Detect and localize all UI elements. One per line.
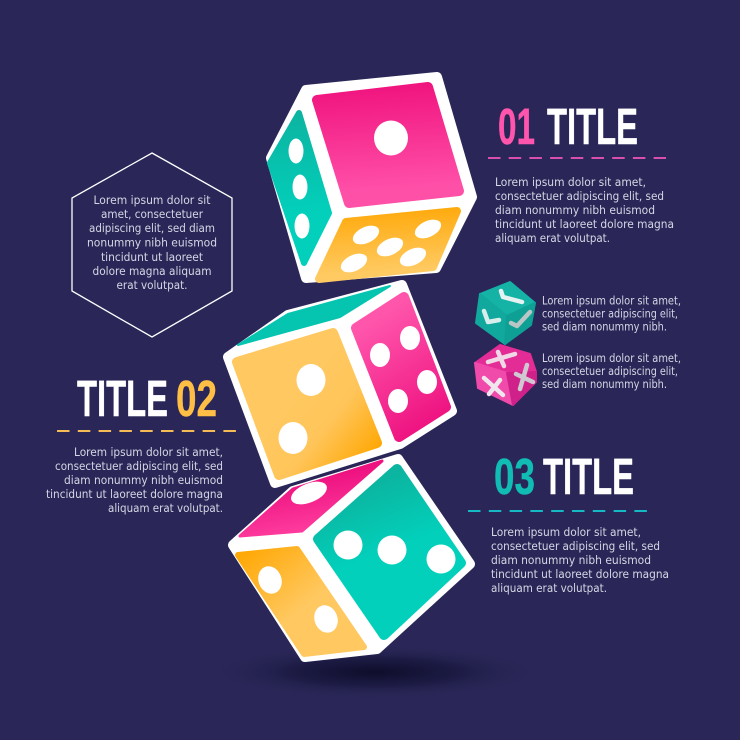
die 1 orange face: [319, 211, 457, 279]
die 1 pink face: [317, 87, 459, 203]
text 02: tincidunt ut laoreet dolore magna: [46, 488, 223, 501]
title 01: [498, 98, 638, 155]
hexagon text: [87, 194, 217, 292]
text 03: [491, 526, 669, 595]
small text: cross die: consectetuer adipiscing elit,: [542, 365, 678, 378]
title 01: 01: [498, 98, 535, 155]
die 3 pips: [254, 477, 456, 636]
title 03: [494, 448, 634, 505]
title 03: 03: [494, 448, 535, 505]
die 3: bottom die: [233, 459, 470, 657]
text 01: [495, 176, 674, 245]
hexagon text: amet, consectetuer: [101, 208, 203, 221]
text 01: diam nonummy nibh euismod: [495, 204, 655, 217]
die 3 teal face: [318, 469, 461, 635]
section 02: [46, 370, 236, 515]
section 03: [468, 448, 669, 595]
text 03: aliquam erat volutpat.: [491, 582, 607, 595]
die 2 pink face: [356, 297, 446, 437]
icon: teal check die: [476, 282, 535, 344]
text 03: tincidunt ut laoreet dolore magna: [491, 568, 669, 581]
die 1 pips: [288, 120, 444, 276]
text 02: [46, 446, 223, 515]
small text: cross die: [542, 352, 681, 391]
small text: check die: [542, 294, 681, 334]
small text: check die: consectetuer adipiscing elit,: [542, 308, 678, 320]
hexagon text: erat volutpat.: [116, 279, 188, 292]
die 3 orange face: [238, 549, 364, 654]
text 03: consectetuer adipiscing elit, sed: [491, 540, 660, 553]
hexagon text: Lorem ipsum dolor sit: [94, 194, 211, 207]
hexagon text: nonummy nibh euismod: [87, 236, 217, 250]
title 02: 02: [176, 370, 217, 427]
icon: pink cross die: [475, 345, 536, 405]
text 01: Lorem ipsum dolor sit amet,: [495, 176, 646, 189]
die 2 teal top face: [238, 286, 390, 345]
hexagon callout: [72, 153, 232, 337]
text 02: Lorem ipsum dolor sit amet,: [74, 446, 223, 459]
text 02: aliquam erat volutpat.: [108, 502, 223, 515]
small text: check die: Lorem ipsum dolor sit amet,: [542, 294, 681, 308]
text 01: tincidunt ut laoreet dolore magna: [495, 218, 674, 231]
die 2: middle die: [228, 285, 452, 483]
text 03: Lorem ipsum dolor sit amet,: [491, 526, 641, 539]
title 02: TITLE: [77, 370, 168, 427]
hexagon text: dolore magna aliquam: [92, 265, 212, 278]
text 01: aliquam erat volutpat.: [495, 232, 610, 245]
text 02: diam nonummy nibh euismod: [64, 474, 223, 487]
die 3 pink top face: [240, 461, 382, 536]
text 03: diam nonummy nibh euismod: [491, 554, 651, 567]
ground shadow: [203, 644, 547, 700]
die 2 orange face: [237, 333, 377, 475]
hexagon text: tincidunt ut laoreet: [101, 251, 204, 264]
hexagon text: adipiscing elit, sed diam: [89, 222, 215, 235]
title 01: TITLE: [547, 98, 638, 155]
small text: check die: sed diam nonummy nibh.: [542, 320, 667, 334]
text 01: consectetuer adipiscing elit, sed: [495, 190, 664, 203]
text 02: consectetuer adipiscing elit, sed: [55, 460, 223, 473]
section 01: [488, 98, 674, 245]
title 03: TITLE: [543, 448, 634, 505]
small text: cross die: sed diam nonummy nibh.: [542, 378, 667, 391]
small text: cross die: Lorem ipsum dolor sit amet,: [542, 352, 681, 365]
die 1 teal face: [270, 113, 329, 263]
die 2 pips: [278, 326, 437, 454]
die 1: top die: [270, 77, 472, 279]
